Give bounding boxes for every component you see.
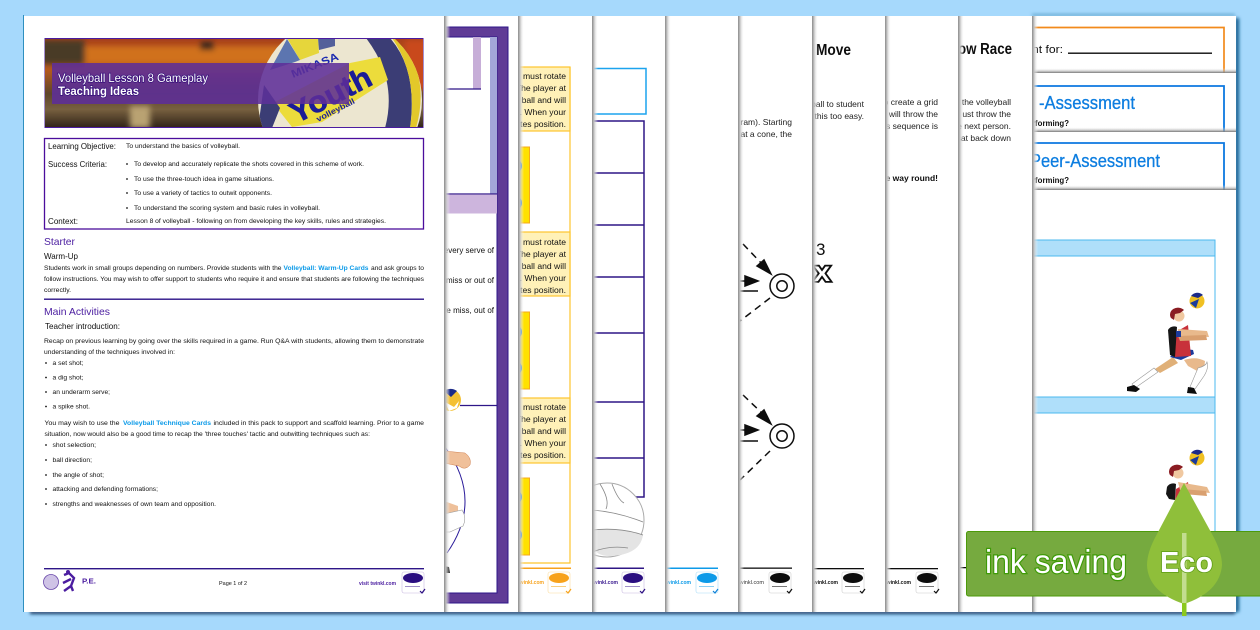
banner title: Volleyball Lesson 8 Gameplay <box>58 71 208 85</box>
panel: purple border scoring sheet <box>439 16 518 612</box>
panel: purple border scoring sheet: miss or out of <box>446 276 495 285</box>
objectives box: To use a variety of tactics to outwit opponents. <box>134 190 272 197</box>
objectives box: To use the three-touch idea in game situations. <box>134 176 274 183</box>
panel: move sheet: this too easy. <box>815 111 864 121</box>
main activities text: Volleyball Technique Cards <box>123 420 211 427</box>
panel: grid sequence sheet: e way round! <box>886 173 938 183</box>
icon: twinkl badge <box>696 572 718 593</box>
panel: relay race sheet <box>957 16 1038 612</box>
panel: cone drill sheet <box>738 16 818 612</box>
card heading three: must rotate <box>523 402 566 412</box>
panel: purple border scoring sheet: every serve of <box>444 246 495 255</box>
panel: grid sequence sheet: his sequence is <box>879 121 938 131</box>
panel: relay race sheet: sat back down <box>957 133 1011 143</box>
eco label: Eco <box>1160 547 1213 579</box>
card heading two: must rotate <box>523 237 566 247</box>
banner: volleyball <box>315 97 356 124</box>
main activities text: attacking and defending formations; <box>52 486 158 493</box>
main activities text: You may wish to use the <box>44 420 120 427</box>
starter text: Volleyball: Warm-Up Cards <box>284 265 369 272</box>
panel: grid sequence sheet: will throw the <box>888 109 938 119</box>
panel: relay race sheet: ow Race <box>958 41 1012 58</box>
card heading one <box>510 67 570 131</box>
purple frame <box>440 27 508 603</box>
card heading one: ates position. <box>515 119 566 129</box>
panel: grid sequence sheet: o create a grid <box>884 97 938 107</box>
sheet: orange assessment <box>1000 16 1236 76</box>
panel: move sheet: Move <box>816 42 851 59</box>
starter text <box>44 251 425 294</box>
card heading two <box>510 232 570 296</box>
sheet: peer assessment one: rforming? <box>1032 119 1069 128</box>
sheet edge shadows <box>518 16 524 612</box>
card image one <box>508 147 530 223</box>
panel: table sheet <box>594 16 671 612</box>
icon: twinkl badge <box>842 572 865 593</box>
panel: table sheet: twinkl.com <box>592 580 618 586</box>
icon: PE runner logo <box>44 570 74 591</box>
icon: volleyball player illustration <box>446 388 471 573</box>
icon: twinkl badge <box>916 572 939 593</box>
objectives box: Learning Objective: <box>48 142 116 151</box>
main activities text: a set shot; <box>52 360 84 367</box>
sheet: peer assessment one: -Assessment <box>1039 92 1135 113</box>
ink saving label: ink saving <box>985 543 1127 580</box>
card heading three <box>510 398 570 463</box>
banner <box>44 38 424 128</box>
sheet: peer assessment two: rforming? <box>1032 176 1069 185</box>
panel: move sheet <box>811 16 891 612</box>
objectives box <box>44 138 424 229</box>
footer <box>44 568 425 593</box>
icon: twinkl badge <box>402 572 425 593</box>
card image three <box>508 478 530 555</box>
main activities text: an underarm serve; <box>52 389 110 396</box>
icon: volleyball <box>258 39 422 127</box>
objectives box: Success Criteria: <box>48 160 107 169</box>
starter text: Students work in small groups depending on numbers. Provide students with the <box>44 265 282 272</box>
card heading two: ates position. <box>515 285 566 295</box>
card heading two: ball and will <box>522 261 566 271</box>
icon: twinkl badge <box>622 572 645 593</box>
starter text: and ask groups to <box>371 265 424 272</box>
ink saving eco badge <box>966 483 1260 616</box>
sheet: technique cards <box>1000 185 1236 612</box>
main activities text: Recap on previous learning by going over the skills required in a game. Run Q&A with students, allowing them to demonstrate <box>44 338 424 345</box>
starter text: follow instructions. You may wish to offer support to students who require it and ensure that students are following the techniques <box>44 276 425 283</box>
icon: player X marker: X <box>814 263 830 286</box>
footer: P.E. <box>82 576 96 586</box>
objectives box: To understand the basics of volleyball. <box>126 143 240 150</box>
footer: Page 1 of 2 <box>219 581 247 587</box>
card heading three: The player at <box>516 414 567 424</box>
panel: move sheet: 3 <box>816 240 825 259</box>
sheet: peer assessment two: Peer-Assessment <box>1030 150 1160 171</box>
green banner <box>966 532 1260 596</box>
panel: blue blank sheet <box>665 16 744 612</box>
icon: twinkl badge <box>548 572 571 593</box>
main activities text: a dig shot; <box>52 374 84 382</box>
panel: move sheet: twinkl.com <box>812 580 838 586</box>
main activities text: strengths and weaknesses of own team and opposition. <box>52 501 216 508</box>
card heading one: The player at <box>516 83 567 93</box>
panel: grid sequence sheet: twinkl.com <box>885 580 911 586</box>
icon: volleyball player two <box>1166 450 1210 514</box>
icon: volleyball player one <box>1127 293 1209 394</box>
objectives box: Lesson 8 of volleyball - following on from developing the key skills, rules and strategies. <box>126 218 386 225</box>
card heading one: l. When your <box>518 107 566 117</box>
card heading two: The player at <box>516 249 567 259</box>
main activities text: the angle of shot; <box>52 472 104 479</box>
main activities text: included in this pack to support and scaffold learning. Prior to a game <box>214 420 424 427</box>
sheet: peer assessment two <box>1000 127 1236 192</box>
panel: relay race sheet: e next person. <box>957 121 1011 131</box>
icon: white volleyball <box>594 482 644 558</box>
panel: cone drill sheet: at a cone, the <box>740 129 792 139</box>
panel: main teaching ideas page <box>23 15 450 612</box>
main activities text: Teacher introduction: <box>45 321 120 331</box>
diagram: upper cone drill <box>738 244 794 321</box>
card heading three: ates position. <box>515 450 566 460</box>
blue title box <box>585 68 646 114</box>
panel: cone drill sheet: ram). Starting <box>740 117 792 127</box>
main activities text: situation, now would also be a good time to recap the 'three touches' tactic and outwitting techniques such as: <box>44 431 370 438</box>
sheet: peer assessment one <box>1000 68 1236 133</box>
objectives box: Context: <box>48 217 78 226</box>
icon: leaf <box>1147 483 1222 604</box>
panel: grid sequence sheet <box>879 16 964 612</box>
card heading three: l. When your <box>518 438 566 448</box>
card heading two: l. When your <box>518 273 566 283</box>
banner subtitle: Teaching Ideas <box>58 84 139 98</box>
panel: assessment sheet stack <box>1000 16 1236 612</box>
panel: blue blank sheet: twinkl.com <box>665 580 691 586</box>
leaf stem <box>1182 533 1186 616</box>
main activities heading: Main Activities <box>44 306 110 318</box>
banner: MIKASA <box>290 51 341 81</box>
card heading one: must rotate <box>523 71 566 81</box>
panel: cone drill sheet: twinkl.com <box>738 580 764 586</box>
main activities text <box>44 321 424 508</box>
main activities text: understanding of the techniques involved in: <box>44 349 175 356</box>
main activities text: shot selection; <box>52 442 96 449</box>
main activities text: ball direction; <box>52 457 92 464</box>
panel: relay race sheet: f the volleyball <box>957 97 1011 107</box>
objectives box: To understand the scoring system and basic rules in volleyball. <box>134 205 320 212</box>
starter heading: Starter <box>44 236 75 248</box>
starter text: correctly. <box>44 287 71 294</box>
main activities text: a spike shot. <box>52 404 90 410</box>
footer: visit twinkl.com <box>359 581 396 587</box>
diagram: lower cone drill <box>738 395 794 480</box>
banner: Youth <box>284 61 378 130</box>
panel: yellow rotation cards sheet: twinkl.com <box>518 580 544 586</box>
panel: purple border scoring sheet: ve miss, out of <box>442 306 495 315</box>
sheet: orange assessment: nt for: <box>1032 44 1063 56</box>
panel: yellow rotation cards sheet <box>508 16 598 612</box>
objectives box: To develop and accurately replicate the shots covered in this scheme of work. <box>134 161 364 168</box>
icon: twinkl badge <box>769 572 792 593</box>
title bar <box>52 63 349 104</box>
card heading three: ball and will <box>522 426 566 436</box>
table <box>592 121 644 497</box>
card heading one: ball and will <box>522 95 566 105</box>
panel: relay race sheet: ust throw the <box>962 109 1011 119</box>
card image two <box>508 312 530 389</box>
panel: move sheet: ball to student <box>811 99 865 109</box>
starter text: Warm-Up <box>44 251 78 261</box>
